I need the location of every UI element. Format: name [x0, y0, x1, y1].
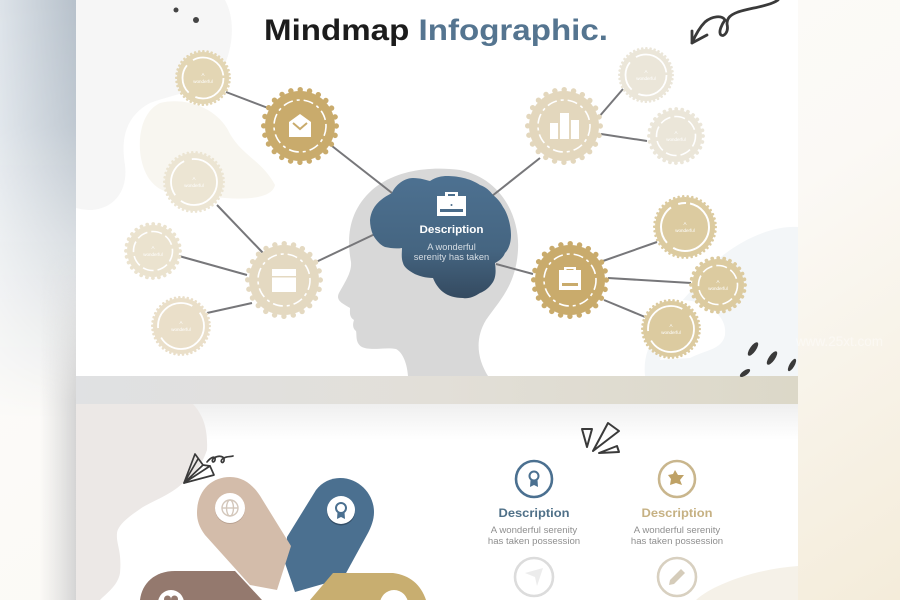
gear: lower left: wonderful — [171, 327, 191, 332]
gear: top left small — [176, 51, 230, 105]
background blob: top left — [76, 404, 207, 600]
icon: envelope — [289, 114, 311, 137]
item: blue description — [488, 461, 580, 547]
gear: beige calendar — [248, 244, 320, 316]
gear: lower left — [152, 297, 210, 355]
gear: right middle: wonderful — [708, 286, 728, 291]
tag: blue — [285, 478, 374, 592]
text: has taken possession — [631, 536, 723, 547]
icon: award — [327, 496, 355, 526]
watermark: www.25xt.com — [795, 334, 883, 349]
description text: A wonderful — [427, 242, 476, 252]
gear: top left small: A — [201, 72, 205, 77]
gear: left middle — [164, 152, 224, 212]
icon: briefcase — [559, 267, 581, 290]
background blob: beige left — [140, 101, 275, 199]
gear: right bottom — [642, 300, 700, 358]
background blob: bottom right — [696, 566, 798, 600]
background blob: grey top left — [76, 0, 232, 210]
gear: left middle: A — [192, 176, 196, 181]
icon: briefcase — [437, 192, 466, 216]
background blob: white cut-out — [660, 300, 725, 360]
gear: right bottom: wonderful — [661, 330, 681, 335]
doodle: curly arrow — [692, 0, 778, 43]
description heading: Description — [420, 224, 484, 236]
tag: beige — [197, 477, 291, 590]
gear: left middle: wonderful — [184, 183, 204, 188]
gear: right top: A — [683, 221, 687, 226]
gear: far left: A — [151, 245, 155, 250]
gear: top right small: wonderful — [636, 76, 656, 81]
panel: mindmap slide — [76, 0, 798, 378]
gear: right top — [654, 196, 716, 258]
doodle: leaves — [739, 341, 798, 378]
head silhouette — [338, 169, 518, 376]
gear: right upper small — [649, 109, 703, 163]
gear: right top: wonderful — [675, 228, 695, 233]
tag: brown — [140, 571, 262, 600]
icon: circle — [380, 590, 408, 600]
doodle: triangles — [582, 423, 619, 453]
connector lines — [179, 89, 691, 317]
item: gold description — [631, 461, 723, 547]
gear: far left — [126, 224, 180, 278]
description text: serenity has taken — [414, 252, 489, 262]
icon: award badge — [516, 461, 552, 497]
gear: right bottom: A — [669, 323, 673, 328]
title: Mindmap Infographic. — [264, 14, 608, 47]
heading: Description — [642, 506, 712, 520]
gear: beige bar chart — [528, 90, 600, 162]
gear: lower left: A — [179, 320, 183, 325]
gear: right middle — [691, 258, 745, 312]
icon: heart — [158, 590, 184, 600]
tag: gold — [310, 573, 426, 600]
gear: gold briefcase — [534, 244, 606, 316]
gear: top right small: A — [644, 69, 648, 74]
gear: right middle: A — [716, 279, 720, 284]
icon: grey paper plane badge — [515, 558, 553, 596]
heading: Description — [498, 506, 570, 520]
icon: beige pencil badge — [658, 558, 696, 596]
gear: right upper small: A — [674, 130, 678, 135]
doodle: paper plane — [184, 454, 233, 483]
icon: star badge — [659, 461, 695, 497]
gear: gold envelope — [264, 90, 336, 162]
icon: bar chart — [550, 113, 579, 139]
gear: top left small: wonderful — [193, 79, 213, 84]
gear: far left: wonderful — [143, 252, 163, 257]
text: has taken possession — [488, 536, 580, 547]
panel: tags slide — [76, 404, 798, 600]
gear: top right small — [619, 48, 673, 102]
icon: globe — [215, 493, 245, 524]
icon: calendar — [272, 269, 296, 292]
text: A wonderful serenity — [491, 525, 577, 536]
background blob: blue bottom right — [645, 227, 798, 376]
text: A wonderful serenity — [634, 525, 720, 536]
gear: right upper small: wonderful — [666, 137, 686, 142]
doodle: dots — [174, 8, 199, 23]
brain with description — [370, 176, 511, 298]
